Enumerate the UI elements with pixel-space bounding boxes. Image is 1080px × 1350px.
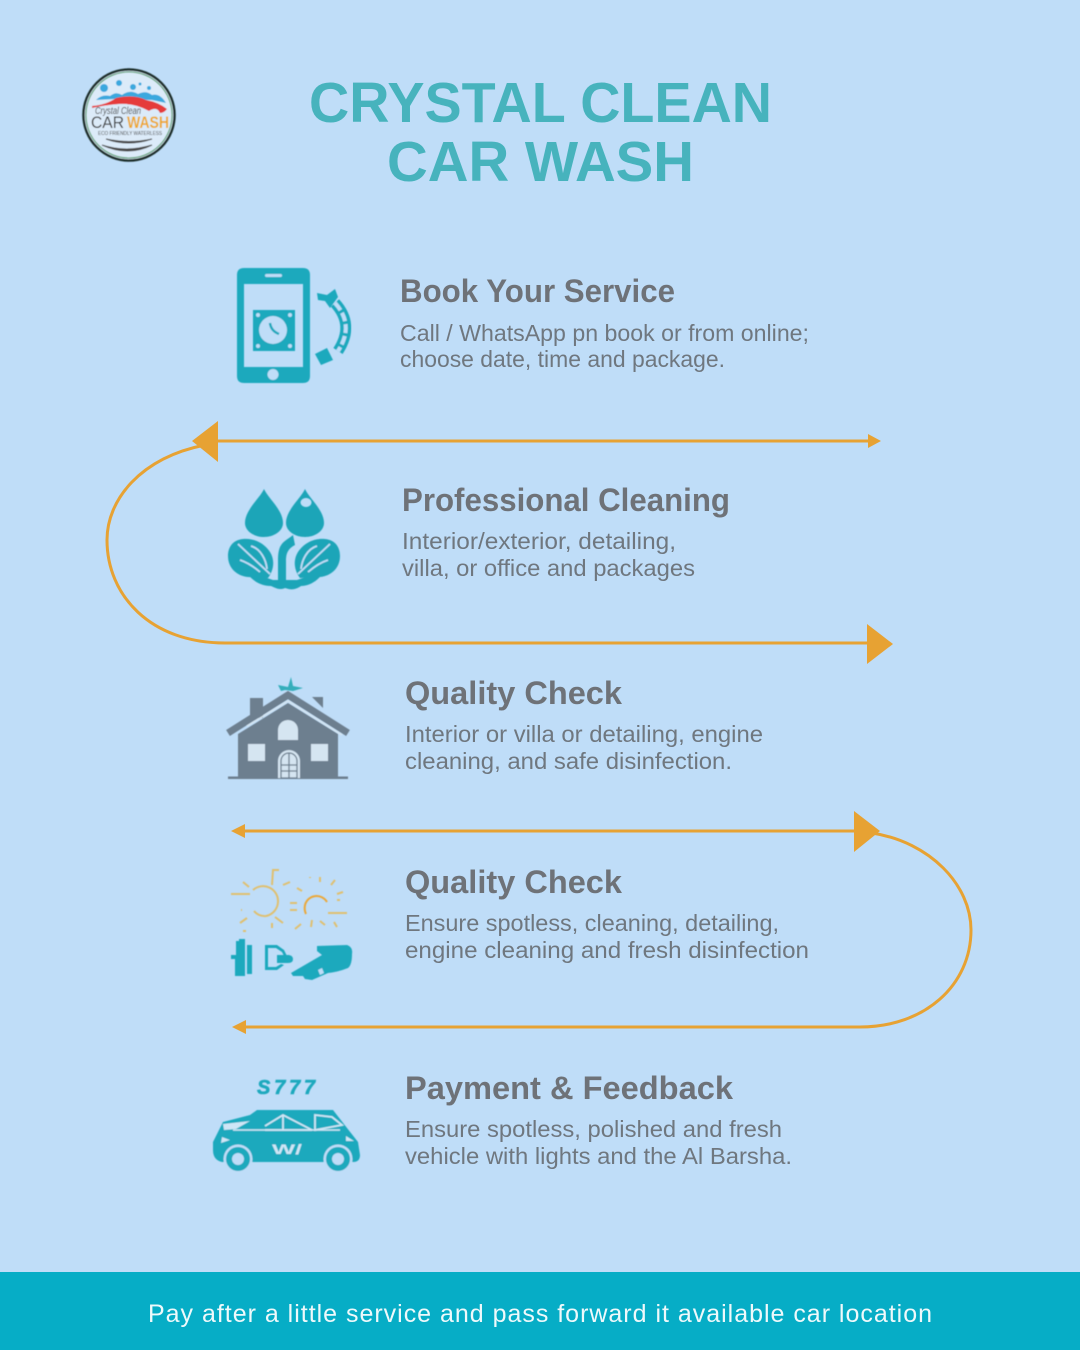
- arrow: top loop: [107, 421, 893, 664]
- step 1 text: [400, 273, 809, 372]
- arrow: lower loop: [231, 811, 971, 1034]
- step 2 text: Professional Cleaning: [402, 482, 730, 518]
- title: [309, 71, 772, 194]
- icon: suns, plug and hand: [231, 870, 352, 980]
- step 3 text: Quality Check: [405, 675, 622, 711]
- icon: house: [228, 677, 348, 779]
- step 5 text: Ensure spotless, polished and fresh: [405, 1116, 782, 1142]
- step 3 text: cleaning, and safe disinfection.: [405, 748, 732, 774]
- step 1 text: Call / WhatsApp pn book or from online;: [400, 320, 809, 346]
- step 2 text: Interior/exterior, detailing,: [402, 528, 676, 554]
- step 4 text: Ensure spotless, cleaning, detailing,: [405, 910, 779, 936]
- step 5 text: [405, 1070, 792, 1169]
- title: CRYSTAL CLEAN: [309, 71, 772, 135]
- step 1 text: choose date, time and package.: [400, 346, 725, 372]
- icon: car with question marks: [213, 1077, 360, 1174]
- step 3 text: [405, 675, 763, 774]
- icon: car with question marks: S777: [257, 1077, 316, 1099]
- icon: phone booking: [237, 268, 346, 383]
- logo: ECO FRIENDLY WATERLESS: [98, 131, 163, 137]
- footer banner: Pay after a little service and pass forward it available car location: [148, 1300, 932, 1328]
- step 4 text: engine cleaning and fresh disinfection: [405, 937, 809, 963]
- step 5 text: vehicle with lights and the Al Barsha.: [405, 1143, 792, 1169]
- step 4 text: [405, 864, 809, 963]
- icon: car with question marks: W/: [272, 1141, 302, 1157]
- title: CAR WASH: [387, 130, 694, 194]
- step 3 text: Interior or villa or detailing, engine: [405, 721, 763, 747]
- step 5 text: Payment & Feedback: [405, 1070, 733, 1106]
- logo: WASH: [127, 113, 169, 132]
- logo: Crystal Clean: [95, 106, 141, 117]
- icon: water drops and leaves: [228, 489, 340, 589]
- step 4 text: Quality Check: [405, 864, 622, 900]
- logo: CAR: [91, 113, 124, 132]
- step 2 text: villa, or office and packages: [402, 555, 695, 581]
- footer banner: [0, 1272, 1080, 1350]
- step 1 text: Book Your Service: [400, 273, 675, 309]
- logo: [84, 70, 174, 160]
- step 2 text: [402, 482, 730, 581]
